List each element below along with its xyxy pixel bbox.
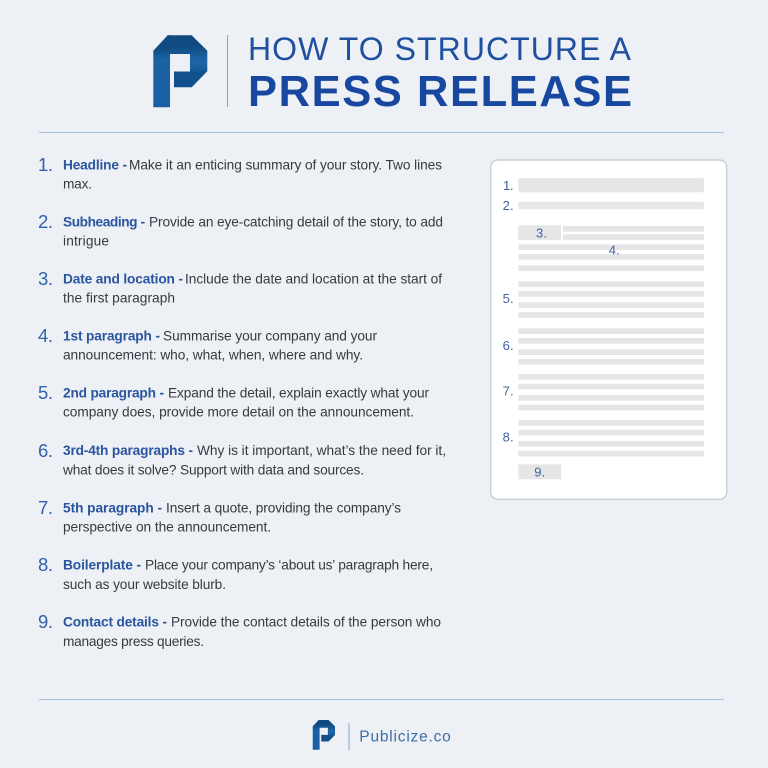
item 6: 3rd-4th paragraphs: what does it solve? Support with data and sources. [62,462,364,477]
item 8: boilerplate [38,554,433,592]
item 2: subheading: Subheading - [63,214,145,229]
item 7: 5th paragraph: 7. [38,497,53,518]
section 2 placeholder [503,198,704,213]
item 4: 1st paragraph: 4. [38,325,53,346]
item 9: contact details: Provide the contact details of the person who [171,615,441,630]
item 6: 3rd-4th paragraphs [38,440,446,477]
icon: small Publicize logo [313,720,335,750]
document card [491,160,727,499]
footer [313,720,451,750]
section 8 placeholder [503,420,704,456]
section 1 placeholder [503,178,704,193]
section 9 placeholder: 9. [534,465,545,480]
item 5: 2nd paragraph [38,382,429,420]
item 5: 2nd paragraph: company does, provide more detail on the announcement. [63,405,414,420]
panel: press release document diagram [491,160,727,499]
item 4: 1st paragraph: Summarise your company and your [163,329,377,344]
item 3: date and location [38,268,442,306]
section 3 placeholder [518,225,561,241]
item 9: contact details [38,611,441,649]
item 2: subheading: Provide an eye-catching detail of the story, to add [149,214,443,229]
header divider [227,35,228,107]
item 8: boilerplate: Place your company’s ‘about us’ paragraph here, [145,558,433,573]
item 1: headline: Make it an enticing summary of your story. Two lines [129,157,442,172]
section 7 placeholder: 7. [503,383,514,398]
item 2: subheading: 2. [38,211,53,232]
item 6: 3rd-4th paragraphs: 3rd-4th paragraphs - [63,443,193,458]
item 7: 5th paragraph: 5th paragraph - [63,500,162,515]
item 3: date and location: 3. [38,268,53,289]
icon: Publicize logo [153,35,207,107]
item 8: boilerplate: Boilerplate - [63,558,141,573]
title: PRESS RELEASE [248,68,632,116]
item 9: contact details: manages press queries. [63,634,204,649]
numbered list [38,154,446,649]
section 5 placeholder: 5. [503,291,514,306]
item 5: 2nd paragraph: 2nd paragraph - [63,386,164,401]
item 7: 5th paragraph: perspective on the announcement. [63,520,271,535]
item 3: date and location: Include the date and location at the start of [185,271,442,286]
item 5: 2nd paragraph: Expand the detail, explain exactly what your [168,386,429,401]
section 4 placeholder [518,226,704,271]
header [153,31,632,116]
item 6: 3rd-4th paragraphs: 6. [38,440,53,461]
section 8 placeholder: 8. [503,429,514,444]
section 6 placeholder: 6. [503,338,514,353]
section 9 placeholder [518,464,561,480]
item 1: headline: 1. [38,154,53,175]
item 2: subheading: intrigue [63,234,109,249]
item 2: subheading [38,211,443,249]
section 7 placeholder [503,374,704,410]
item 8: boilerplate: 8. [38,554,53,575]
item 1: headline: Headline - [63,157,127,172]
item 1: headline [38,154,442,192]
section 6 placeholder [503,328,704,365]
section 5 placeholder [503,281,704,318]
item 7: 5th paragraph [38,497,401,535]
section 2 placeholder: 2. [503,198,514,213]
item 3: date and location: Date and location - [63,271,183,286]
footer divider [348,723,350,750]
section 3 placeholder: 3. [536,226,547,241]
item 9: contact details: Contact details - [63,615,167,630]
item 8: boilerplate: such as your website blurb. [63,577,226,592]
footer brand name: Publicize.co [359,729,451,746]
title [248,31,632,116]
item 7: 5th paragraph: Insert a quote, providing the company’s [166,500,401,515]
item 1: headline: max. [63,177,92,192]
item 4: 1st paragraph: announcement: who, what, when, where and why. [63,347,363,362]
item 4: 1st paragraph [38,325,377,362]
title: HOW TO STRUCTURE A [248,31,632,67]
item 6: 3rd-4th paragraphs: Why is it important, what’s the need for it, [197,443,446,458]
item 9: contact details: 9. [38,611,53,632]
item 5: 2nd paragraph: 5. [38,382,53,403]
section 4 placeholder: 4. [609,242,620,257]
section 1 placeholder: 1. [503,178,514,193]
item 3: date and location: the first paragraph [63,291,175,306]
item 4: 1st paragraph: 1st paragraph - [63,329,160,344]
